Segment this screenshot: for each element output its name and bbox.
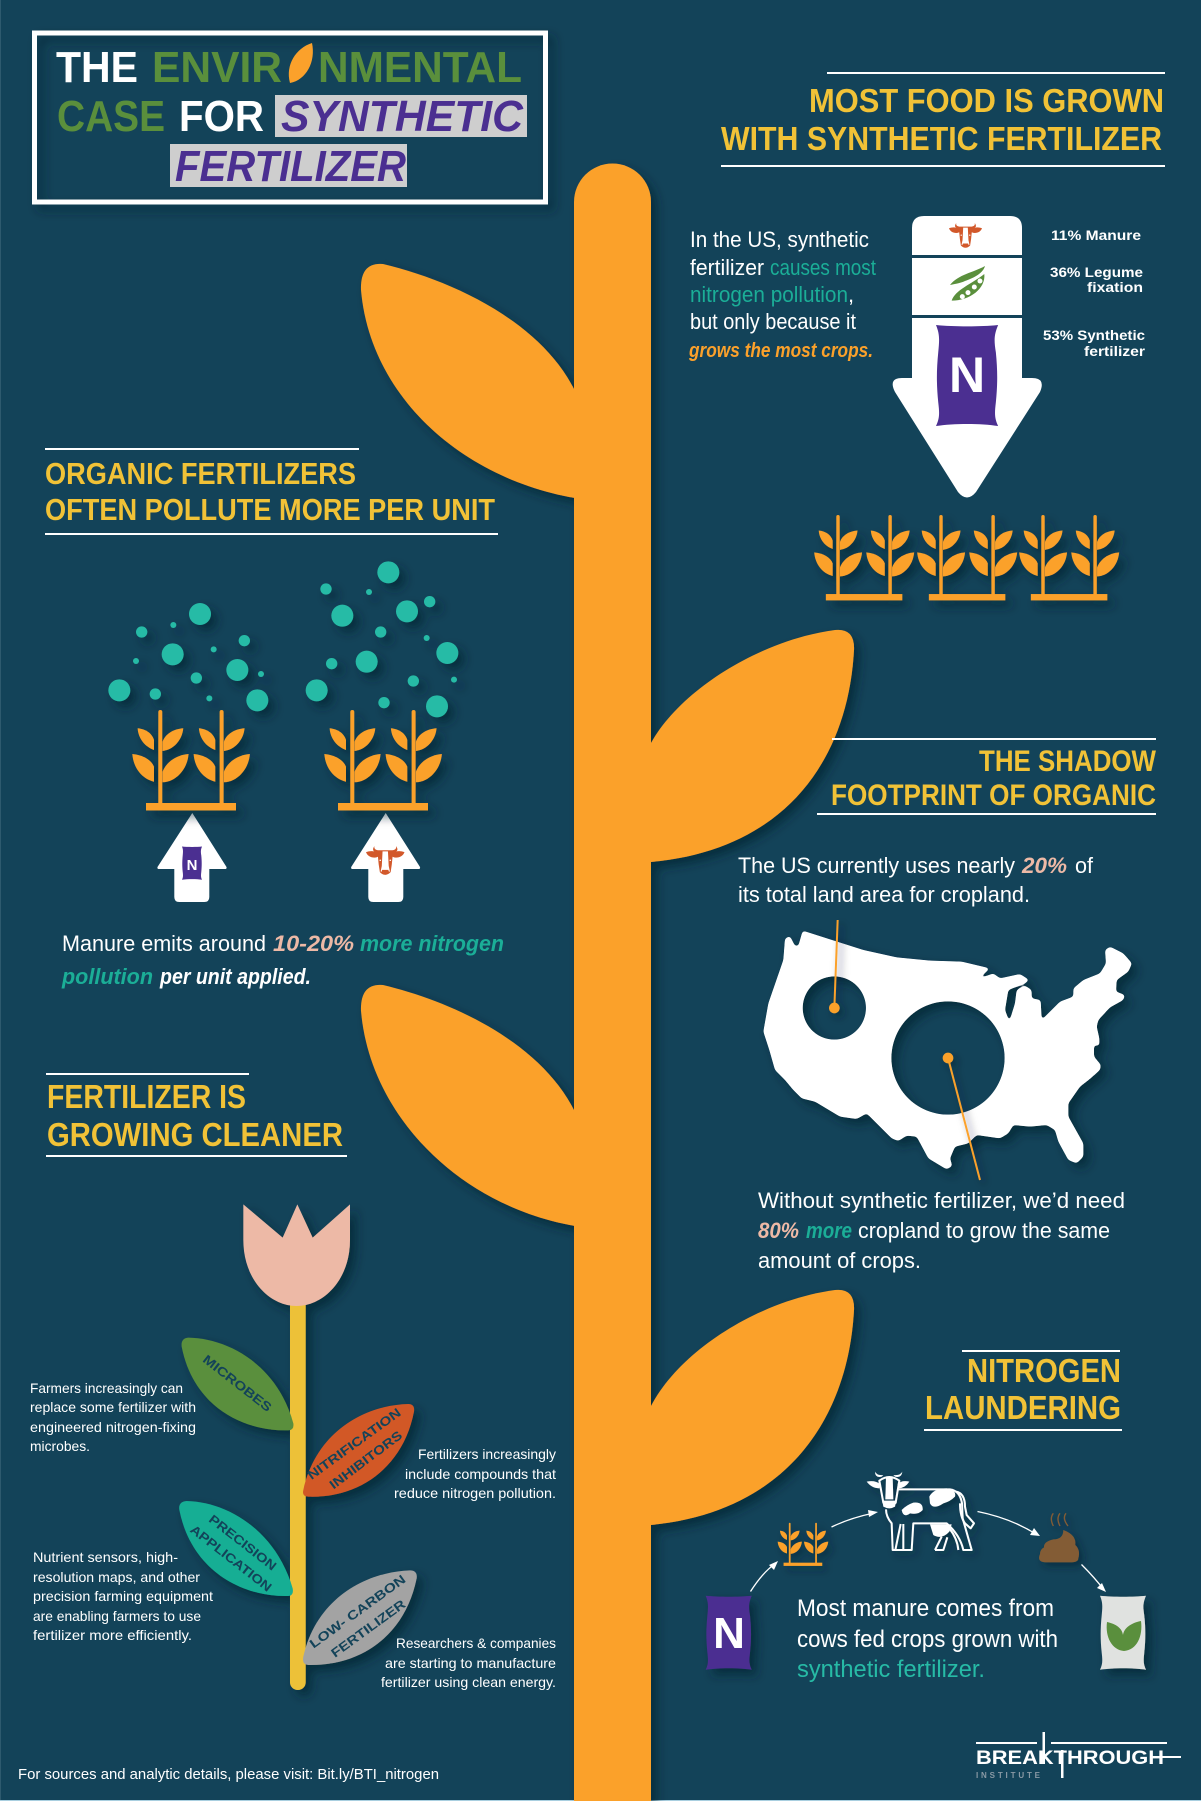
leaf labels (187, 1352, 408, 1660)
icon: cow (867, 1472, 974, 1550)
leaf upper right (651, 630, 854, 862)
icon: nitrogen bag (936, 325, 998, 426)
text: microbes: replace some fertilizer with (30, 1399, 196, 1415)
icon: small bag: N (187, 857, 197, 874)
panel: fertilizer is growing cleaner (30, 1073, 556, 1690)
callout: current cropland marker (829, 920, 840, 1013)
icon: crop pair right (324, 710, 442, 810)
text: microbes: microbes. (30, 1438, 90, 1454)
title text: SYNTHETIC (281, 92, 524, 141)
panel: most food grown with synthetic fertilizer (688, 72, 1165, 600)
text: nitrogen pollution: , (848, 282, 854, 307)
text: precision application: Nutrient sensors, high- (33, 1549, 178, 1565)
flower stem (290, 1297, 306, 1690)
leaf labels: MICROBES (200, 1352, 274, 1415)
icon: cow head (949, 223, 982, 248)
flower illustration (179, 1204, 417, 1690)
heading: most food: WITH SYNTHETIC FERTILIZER (721, 120, 1162, 157)
title highlight fertilizer (170, 144, 407, 187)
leaf labels: NITRIFICATION (305, 1406, 404, 1483)
title panel (34, 33, 546, 202)
flower head (243, 1204, 350, 1306)
leaf labels: LOW- CARBON (307, 1572, 408, 1651)
title text: ENVIR (152, 43, 282, 92)
text: nitrogen pollution: In the US, synthetic (690, 227, 869, 252)
text: manure emissions: per unit applied. (159, 964, 311, 989)
heading: most food (721, 72, 1165, 167)
heading: growing cleaner: GROWING CLEANER (47, 1116, 343, 1153)
panel: shadow footprint of organic (738, 738, 1157, 1273)
leaf labels: FERTILIZER (328, 1597, 408, 1660)
text: low-carbon fertilizer: fertilizer using clean energy. (381, 1674, 556, 1690)
logo: Breakthrough Institute: INSTITUTE (976, 1771, 1041, 1780)
text: nitrogen pollution: but only because it (690, 309, 856, 334)
arrow: manure up (351, 813, 420, 902)
heading: nitrogen laundering: NITROGEN (967, 1352, 1121, 1389)
logo: Breakthrough Institute (976, 1732, 1181, 1780)
text: manure origin (797, 1595, 1058, 1683)
text: nitrogen pollution (688, 227, 876, 362)
arrow: synthetic up (157, 813, 227, 902)
icon: crop pair left (132, 710, 250, 810)
text: precision application: resolution maps, and other (33, 1569, 200, 1585)
leaf labels: APPLICATION (187, 1522, 274, 1595)
leaf lower right (651, 1290, 854, 1525)
text: cropland need: Without synthetic fertilizer, we’d need (758, 1188, 1125, 1213)
text: nitrification inhibitors: include compounds that (405, 1466, 556, 1482)
text: nitrogen pollution: causes most (770, 255, 876, 280)
text: manure emissions: pollution (61, 964, 153, 989)
heading: nitrogen laundering: LAUNDERING (925, 1389, 1121, 1426)
map of the United States with cropland circles (763, 931, 1132, 1169)
labels: nitrogen shares: 11% Manure (1051, 227, 1141, 243)
icon: small cow head (366, 846, 404, 875)
panel: organic fertilizers pollute more (45, 448, 504, 989)
text: cropland need: 80% (758, 1218, 799, 1243)
text: cropland need: amount of crops. (758, 1248, 921, 1273)
text: microbes: Farmers increasingly can (30, 1380, 183, 1396)
text: precision application: are enabling farmers to use (33, 1608, 201, 1624)
text: precision application: fertilizer more efficiently. (33, 1627, 192, 1643)
text: nitrogen pollution: grows the most crops. (688, 340, 873, 362)
heading: most food: MOST FOOD IS GROWN (809, 82, 1164, 119)
text: microbes: engineered nitrogen-fixing (30, 1419, 196, 1435)
heading: shadow footprint (817, 738, 1157, 815)
text: nitrification inhibitors: Fertilizers increasingly (418, 1446, 556, 1462)
arrow with nitrogen sources (893, 216, 1042, 498)
text: nitrogen pollution: fertilizer (690, 255, 764, 280)
text: manure emissions: 10-20% (273, 931, 354, 956)
text: manure origin: Most manure comes from (797, 1595, 1054, 1622)
icon: organic fertilizer bag (1100, 1596, 1146, 1670)
text: nitrification inhibitors (394, 1446, 556, 1501)
title text: FOR (179, 92, 264, 141)
callout: additional cropland marker (943, 1053, 980, 1180)
text: microbes (30, 1380, 196, 1454)
icon: manure (1039, 1513, 1079, 1562)
text: cropland need: more (806, 1218, 852, 1243)
icon: crops (778, 1523, 828, 1566)
icon: title leaf (289, 43, 313, 83)
title frame (34, 33, 546, 202)
icon: nitrogen bag: N (949, 347, 985, 403)
text: cropland need (758, 1188, 1125, 1273)
leaf: low-carbon fertilizer (303, 1570, 417, 1665)
stem (574, 164, 651, 1801)
heading: organic fertilizers: ORGANIC FERTILIZERS (45, 456, 356, 491)
text: precision application: precision farming equipment (33, 1588, 213, 1604)
icon: row of crops (814, 515, 1119, 600)
panel: nitrogen laundering (706, 1350, 1146, 1683)
heading: growing cleaner (46, 1073, 347, 1157)
text: low-carbon fertilizer: are starting to manufacture (385, 1655, 556, 1671)
text: precision application (33, 1549, 213, 1643)
leaf labels: INHIBITORS (327, 1428, 405, 1492)
leaf lower left (361, 985, 575, 1226)
heading: shadow footprint: THE SHADOW (979, 745, 1157, 778)
text: cropland share: 20% (1021, 853, 1067, 878)
leaf labels: PRECISION (206, 1512, 279, 1573)
heading: shadow footprint: FOOTPRINT OF ORGANIC (831, 779, 1156, 812)
labels: nitrogen shares (1043, 227, 1146, 359)
heading: growing cleaner: FERTILIZER IS (47, 1078, 246, 1115)
flow arrows (750, 1510, 1106, 1592)
text: manure emissions: more nitrogen (360, 931, 504, 956)
title text: NMENTAL (318, 43, 522, 92)
text: nitrification inhibitors: reduce nitrogen pollution. (394, 1485, 556, 1501)
sources note: For sources and analytic details, please visit: Bit.ly/BTI_nitrogen (18, 1766, 439, 1783)
bag letter: N (713, 1609, 745, 1658)
leaf: precision application (179, 1501, 293, 1596)
bubbles: left emissions (108, 603, 268, 711)
heading: organic fertilizers: OFTEN POLLUTE MORE PER UNIT (45, 492, 495, 527)
title text (56, 43, 524, 191)
text: manure origin: synthetic fertilizer. (797, 1656, 985, 1683)
central orange plant stem with leaves (361, 164, 854, 1801)
logo: Breakthrough Institute: BREAKTHROUGH (976, 1748, 1164, 1769)
text: cropland share: its total land area for cropland. (738, 882, 1030, 907)
leaf: nitrification inhibitors (303, 1404, 414, 1497)
bubbles: right emissions (306, 561, 458, 717)
labels: nitrogen shares: 53% Synthetic (1043, 327, 1145, 343)
title text: CASE (57, 92, 165, 141)
text: low-carbon fertilizer: Researchers & companies (396, 1635, 556, 1651)
icon: nitrogen bag (706, 1596, 752, 1670)
title text: THE (56, 43, 138, 92)
text: cropland share (738, 853, 1094, 907)
labels: nitrogen shares: fertilizer (1084, 343, 1146, 359)
text: cropland share: of (1075, 853, 1094, 878)
labels: nitrogen shares: fixation (1087, 279, 1143, 295)
title text: FERTILIZER (175, 142, 406, 191)
title highlight synthetic (275, 95, 527, 137)
text: nitrogen pollution: nitrogen pollution (690, 282, 848, 307)
heading: organic fertilizers (45, 448, 498, 535)
heading: nitrogen laundering (924, 1350, 1122, 1431)
text: manure emissions: Manure emits around (62, 931, 266, 956)
leaf: microbes (182, 1338, 293, 1430)
icon: pea pod (950, 266, 985, 301)
text: manure origin: cows fed crops grown with (797, 1626, 1058, 1653)
leaf upper left (361, 264, 575, 498)
text: cropland need: cropland to grow the same (858, 1218, 1110, 1243)
text: manure emissions (61, 931, 504, 989)
text: cropland share: The US currently uses nearly (738, 853, 1015, 878)
labels: nitrogen shares: 36% Legume (1050, 264, 1143, 280)
text: low-carbon fertilizer (381, 1635, 556, 1690)
